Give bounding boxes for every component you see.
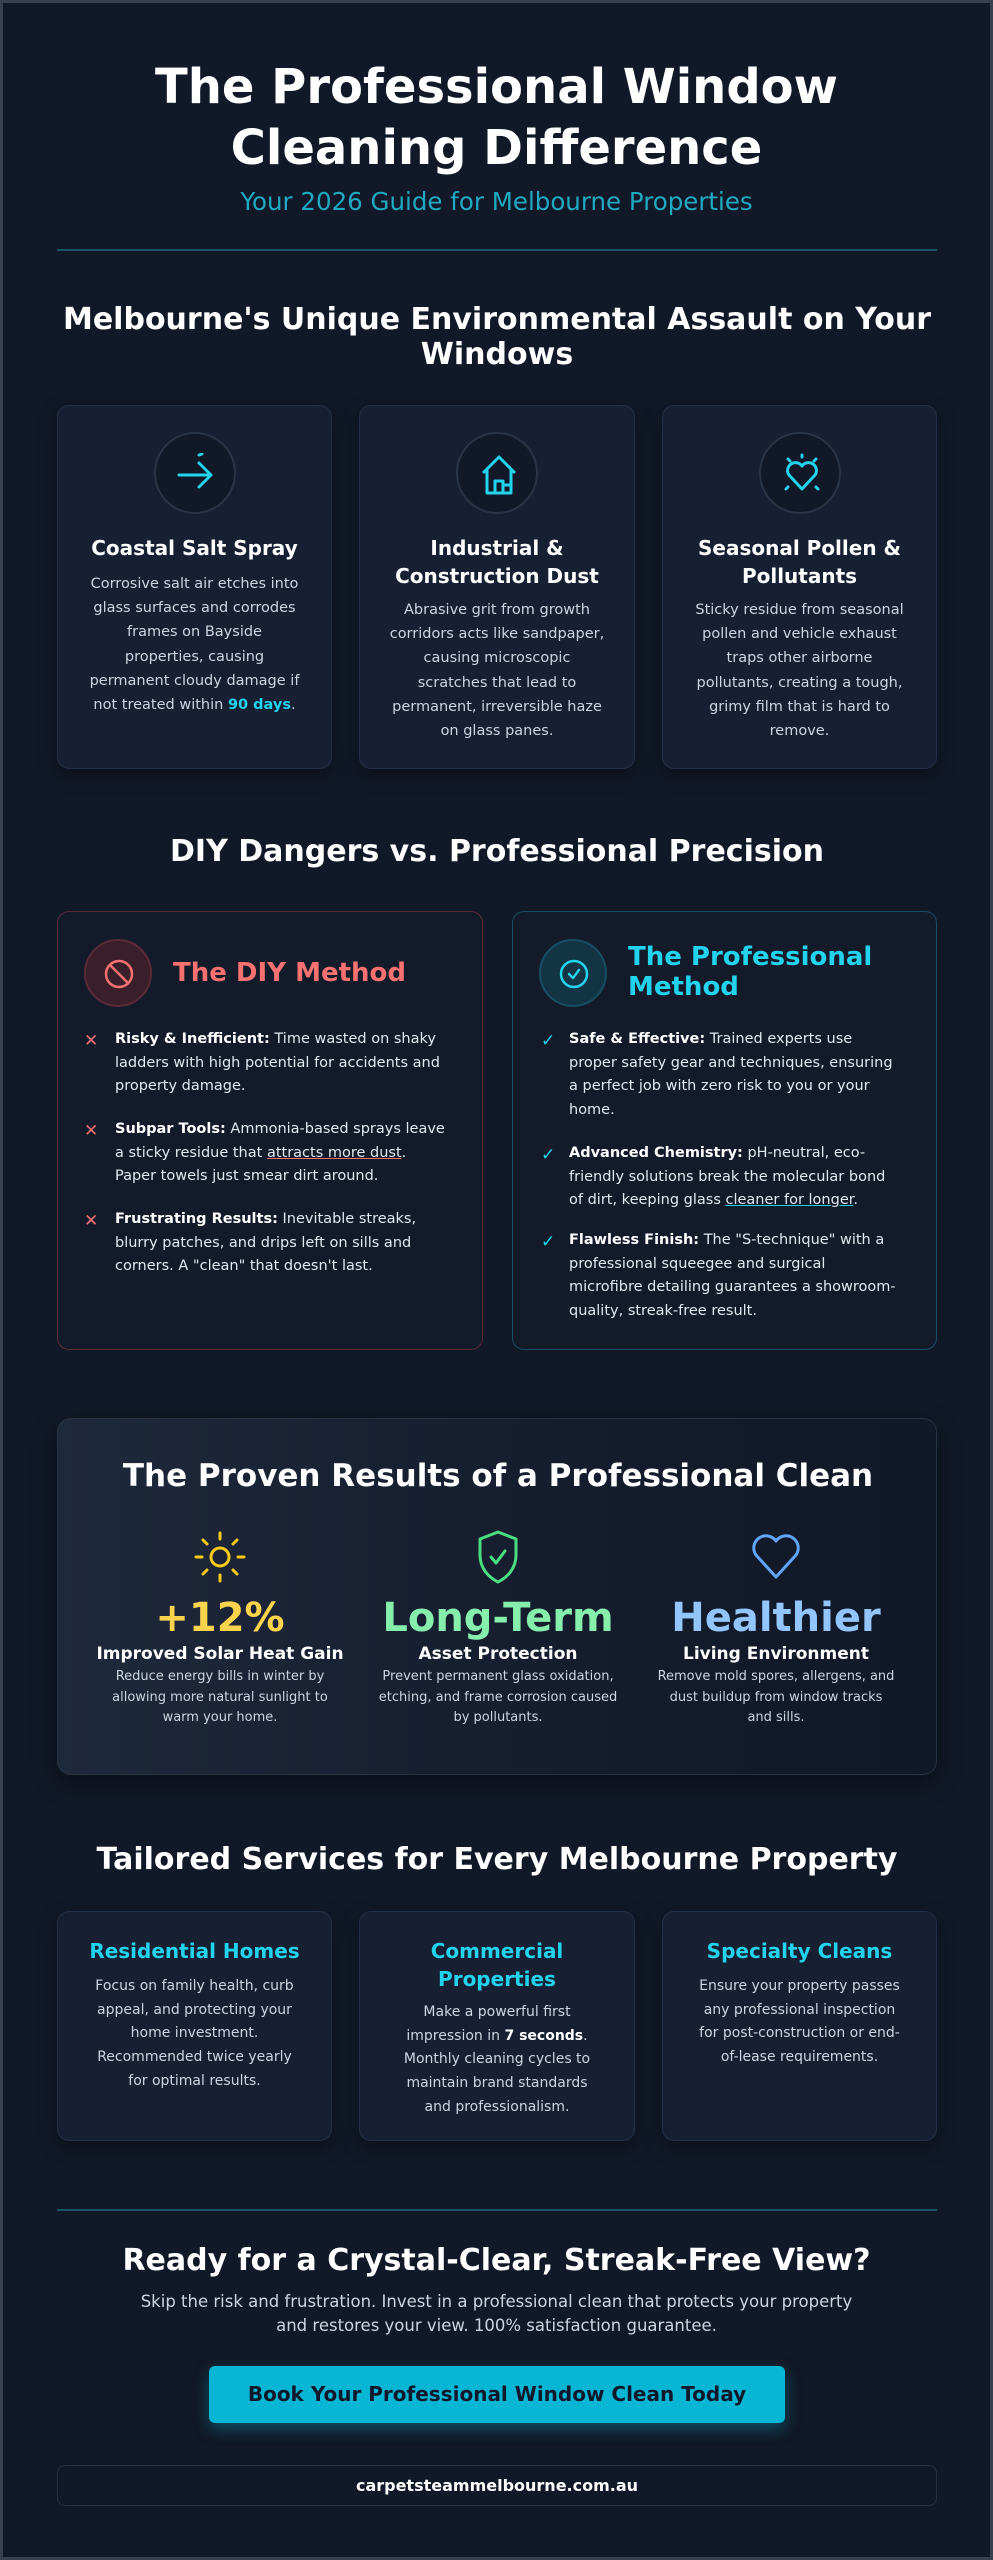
heading: environmental assault: Melbourne's Unique Environmental Assault on Your bbox=[63, 302, 931, 337]
card: industrial dust bbox=[359, 405, 635, 769]
list: Flawless Finish: The "S-technique" with a bbox=[569, 1232, 884, 1248]
stat: asset protection bbox=[379, 1530, 617, 1725]
card text: pollen and vehicle exhaust bbox=[702, 626, 897, 642]
panel: professional bbox=[512, 911, 937, 1350]
footer url bbox=[57, 2465, 937, 2506]
panel heading: The DIY Method bbox=[173, 958, 406, 988]
stat: asset protection: Long-Term bbox=[382, 1595, 614, 1641]
service: specialty bbox=[662, 1911, 937, 2141]
list bbox=[541, 1031, 896, 1319]
card text: Sticky residue from seasonal bbox=[695, 602, 904, 618]
heading: tailored services: Tailored Services for Every Melbourne Property bbox=[97, 1842, 897, 1877]
heading: environmental assault bbox=[63, 302, 931, 372]
card title: Coastal Salt Spray bbox=[91, 536, 298, 560]
list: ✕ bbox=[84, 1121, 98, 1141]
panel heading bbox=[628, 942, 872, 1002]
card title: Seasonal Pollen & bbox=[698, 536, 901, 560]
list: Subpar Tools: Ammonia-based sprays leave bbox=[115, 1121, 445, 1137]
card text: properties, causing bbox=[125, 649, 264, 665]
stat: asset protection: Asset Protection bbox=[419, 1644, 577, 1664]
card text: grimy film that is hard to bbox=[709, 699, 890, 715]
card text: causing microscopic bbox=[424, 650, 570, 666]
card text: remove. bbox=[770, 723, 829, 739]
panel heading: Method bbox=[628, 972, 739, 1002]
list: microfibre detailing guarantees a showroom- bbox=[569, 1279, 896, 1295]
list: Safe & Effective: Trained experts use bbox=[569, 1031, 852, 1047]
service: commercial: Make a powerful first impression in 7 seconds. Monthly cleaning cycles to maintain brand standards and professionalism. bbox=[404, 2004, 590, 2115]
card title: Industrial & bbox=[430, 536, 564, 560]
list: Risky & Inefficient: Time wasted on shaky bbox=[115, 1031, 436, 1047]
button: Book Your Professional Window Clean Today bbox=[248, 2382, 746, 2406]
list: ✕ bbox=[84, 1211, 98, 1231]
heading: environmental assault: Windows bbox=[421, 337, 573, 372]
CTA text: Skip the risk and frustration. Invest in a professional clean that protects your property and restores your view. 100% satisfaction guarantee. bbox=[141, 2292, 852, 2335]
button bbox=[209, 2366, 785, 2423]
panel: proven results bbox=[57, 1418, 937, 1775]
list: blurry patches, and drips left on sills and bbox=[115, 1235, 411, 1251]
card text: pollutants, creating a tough, bbox=[697, 675, 902, 691]
icon: house bbox=[456, 432, 538, 514]
service: specialty: Ensure your property passes any professional inspection for post-construction or end-of-lease requirements. bbox=[699, 1978, 900, 2065]
stat: asset protection: Prevent permanent glass oxidation, bbox=[382, 1669, 614, 1684]
title: The Professional Window bbox=[155, 59, 838, 115]
stat: healthier: dust buildup from window tracks bbox=[670, 1690, 882, 1704]
card text: Abrasive grit from growth bbox=[404, 602, 590, 618]
list: professional squeegee and surgical bbox=[569, 1256, 825, 1272]
stat: solar: Improved Solar Heat Gain bbox=[96, 1644, 344, 1664]
icon: shield bbox=[478, 1530, 518, 1584]
card text: Corrosive salt air etches into bbox=[91, 576, 298, 592]
footer url: carpetsteammelbourne.com.au bbox=[356, 2476, 638, 2495]
stat: healthier bbox=[658, 1534, 894, 1725]
card text: scratches that lead to bbox=[418, 675, 576, 691]
service: residential bbox=[57, 1911, 332, 2141]
card text: frames on Bayside bbox=[127, 624, 262, 640]
heading: DIY vs pro: DIY Dangers vs. Professional Precision bbox=[170, 834, 824, 869]
stat: solar: +12% bbox=[155, 1595, 285, 1641]
icon: sun bbox=[194, 1532, 246, 1582]
service: residential: Residential Homes bbox=[89, 1939, 300, 1963]
panel: DIY bbox=[57, 911, 483, 1350]
list: corners. A "clean" that doesn't last. bbox=[115, 1258, 373, 1274]
list: ✓ bbox=[541, 1031, 555, 1051]
card: pollen bbox=[662, 405, 937, 769]
stat: healthier: Remove mold spores, allergens, and bbox=[658, 1669, 894, 1684]
list: ladders with high potential for accidents and bbox=[115, 1055, 440, 1071]
card text bbox=[390, 602, 604, 739]
card text: permanent, irreversible haze bbox=[392, 699, 602, 715]
list bbox=[84, 1031, 445, 1274]
card title bbox=[698, 536, 901, 588]
results heading: The Proven Results of a Professional Clean bbox=[123, 1458, 873, 1494]
stat: solar: allowing more natural sunlight to bbox=[112, 1690, 328, 1704]
title: Cleaning Difference bbox=[231, 120, 762, 176]
list: Paper towels just smear dirt around. bbox=[115, 1168, 378, 1184]
icon: heart sparkle bbox=[759, 432, 841, 514]
list: a perfect job with zero risk to you or your bbox=[569, 1078, 870, 1094]
card text: glass surfaces and corrodes bbox=[93, 600, 296, 616]
card: coastal salt spray bbox=[57, 405, 332, 769]
stat: asset protection: by pollutants. bbox=[453, 1710, 543, 1725]
card title: Pollutants bbox=[742, 564, 857, 588]
list: property damage. bbox=[115, 1078, 246, 1094]
service: specialty: Specialty Cleans bbox=[707, 1939, 892, 1963]
card text: on glass panes. bbox=[441, 723, 553, 739]
stat: healthier: Healthier bbox=[671, 1595, 881, 1641]
stat: solar: Reduce energy bills in winter by bbox=[116, 1669, 324, 1684]
stat: healthier: and sills. bbox=[747, 1710, 805, 1725]
list: Advanced Chemistry: pH-neutral, eco- bbox=[569, 1145, 865, 1161]
list: a sticky residue that attracts more dust. bbox=[115, 1145, 406, 1161]
card text: traps other airborne bbox=[727, 650, 872, 666]
icon: heart bbox=[752, 1534, 800, 1579]
stat: healthier: Living Environment bbox=[683, 1644, 869, 1664]
stat: asset protection: etching, and frame corrosion caused bbox=[379, 1690, 617, 1704]
stat: solar: warm your home. bbox=[163, 1710, 277, 1725]
list: quality, streak-free result. bbox=[569, 1303, 757, 1319]
list: home. bbox=[569, 1102, 615, 1118]
list: ✓ bbox=[541, 1232, 555, 1252]
icon: arrow bbox=[154, 432, 236, 514]
icon: ban bbox=[84, 939, 152, 1007]
icon: check bbox=[539, 939, 607, 1007]
list: proper safety gear and techniques, ensuring bbox=[569, 1055, 893, 1071]
card text bbox=[90, 576, 300, 713]
service: commercial bbox=[359, 1911, 635, 2141]
service: commercial: Commercial bbox=[431, 1939, 563, 1963]
card title bbox=[395, 536, 599, 588]
service: commercial: Properties bbox=[438, 1967, 556, 1991]
card text: corridors acts like sandpaper, bbox=[390, 626, 604, 642]
title bbox=[155, 59, 838, 176]
list: ✓ bbox=[541, 1145, 555, 1165]
list: ✕ bbox=[84, 1031, 98, 1051]
list: friendly solutions break the molecular bond bbox=[569, 1169, 885, 1185]
service: residential: Focus on family health, curb appeal, and protecting your home investment. Recommended twice yearly for optimal results. bbox=[95, 1978, 294, 2089]
subtitle: Your 2026 Guide for Melbourne Properties bbox=[240, 187, 753, 216]
CTA heading: Ready for a Crystal-Clear, Streak-Free View? bbox=[122, 2243, 871, 2278]
panel heading: The Professional bbox=[628, 942, 872, 972]
card text: not treated within 90 days. bbox=[93, 697, 296, 713]
card text: permanent cloudy damage if bbox=[90, 673, 299, 689]
stat: solar bbox=[96, 1532, 344, 1725]
card text bbox=[695, 602, 904, 739]
list: Frustrating Results: Inevitable streaks, bbox=[115, 1211, 416, 1227]
card title: Construction Dust bbox=[395, 564, 599, 588]
list: of dirt, keeping glass cleaner for longer. bbox=[569, 1192, 858, 1208]
